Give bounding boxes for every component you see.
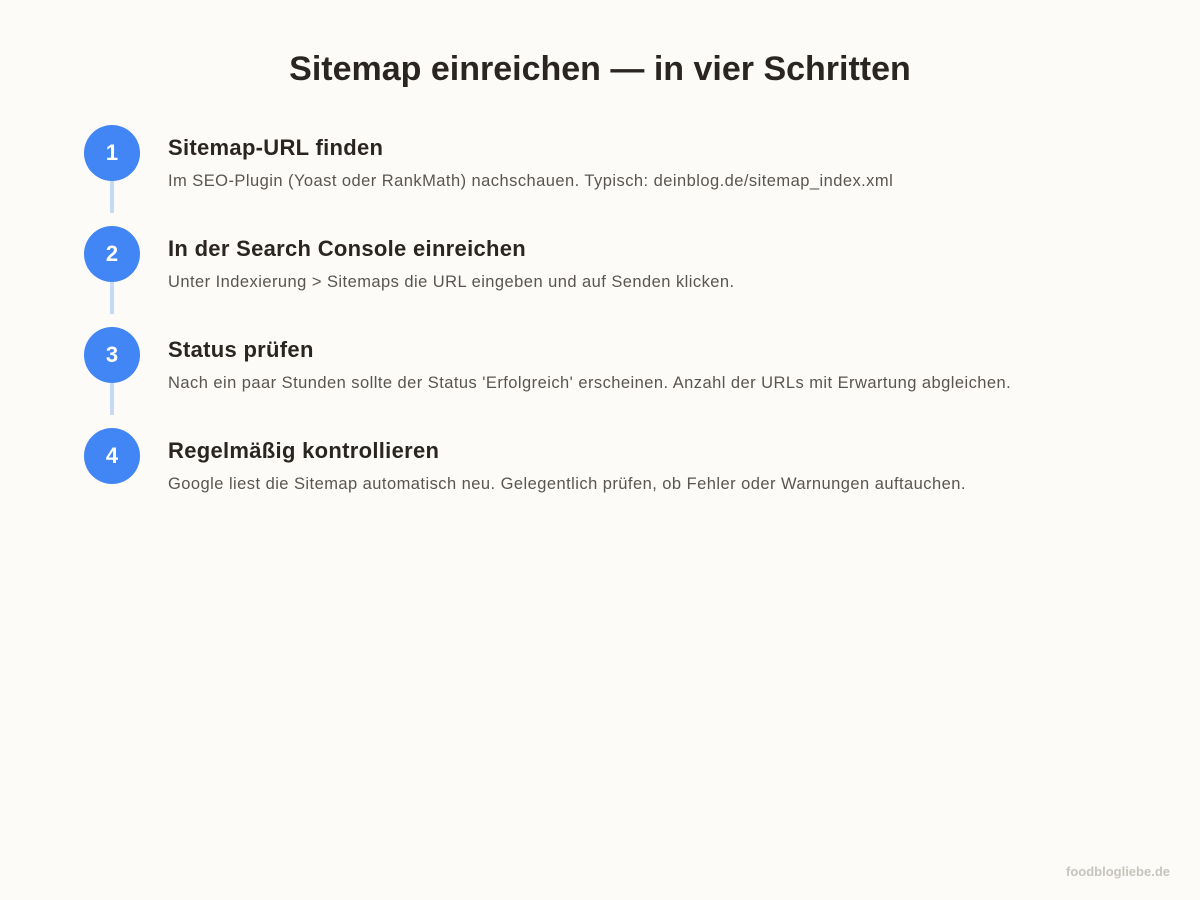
text 3: Nach ein paar Stunden sollte der Status 'Erfolgreich' erscheinen. Anzahl der URLs mit Erwartung abgleichen. [168, 374, 1011, 392]
step 2 [84, 226, 735, 314]
heading 3: Status prüfen [168, 337, 314, 362]
heading 2: In der Search Console einreichen [168, 236, 526, 261]
icon: number 4 [84, 428, 140, 484]
icon: number 2: 2 [106, 241, 118, 266]
text 4: Google liest die Sitemap automatisch neu. Gelegentlich prüfen, ob Fehler oder Warnungen auftauchen. [168, 475, 966, 493]
text 1: Im SEO-Plugin (Yoast oder RankMath) nachschauen. Typisch: deinblog.de/sitemap_index.xml [168, 172, 893, 190]
text 2: Unter Indexierung > Sitemaps die URL eingeben und auf Senden klicken. [168, 273, 735, 291]
icon: number 3 [84, 327, 140, 383]
title: Sitemap einreichen — in vier Schritten [289, 50, 911, 88]
step 4 [84, 428, 966, 493]
heading 4: Regelmäßig kontrollieren [168, 438, 439, 463]
footer: foodblogliebe.de [1066, 864, 1170, 879]
icon: number 2 [84, 226, 140, 282]
heading 1: Sitemap-URL finden [168, 135, 383, 160]
icon: number 4: 4 [106, 443, 118, 468]
icon: number 1: 1 [106, 140, 118, 165]
icon: number 1 [84, 125, 140, 181]
icon: number 3: 3 [106, 342, 118, 367]
step 1 [84, 125, 893, 213]
step 3 [84, 327, 1011, 415]
